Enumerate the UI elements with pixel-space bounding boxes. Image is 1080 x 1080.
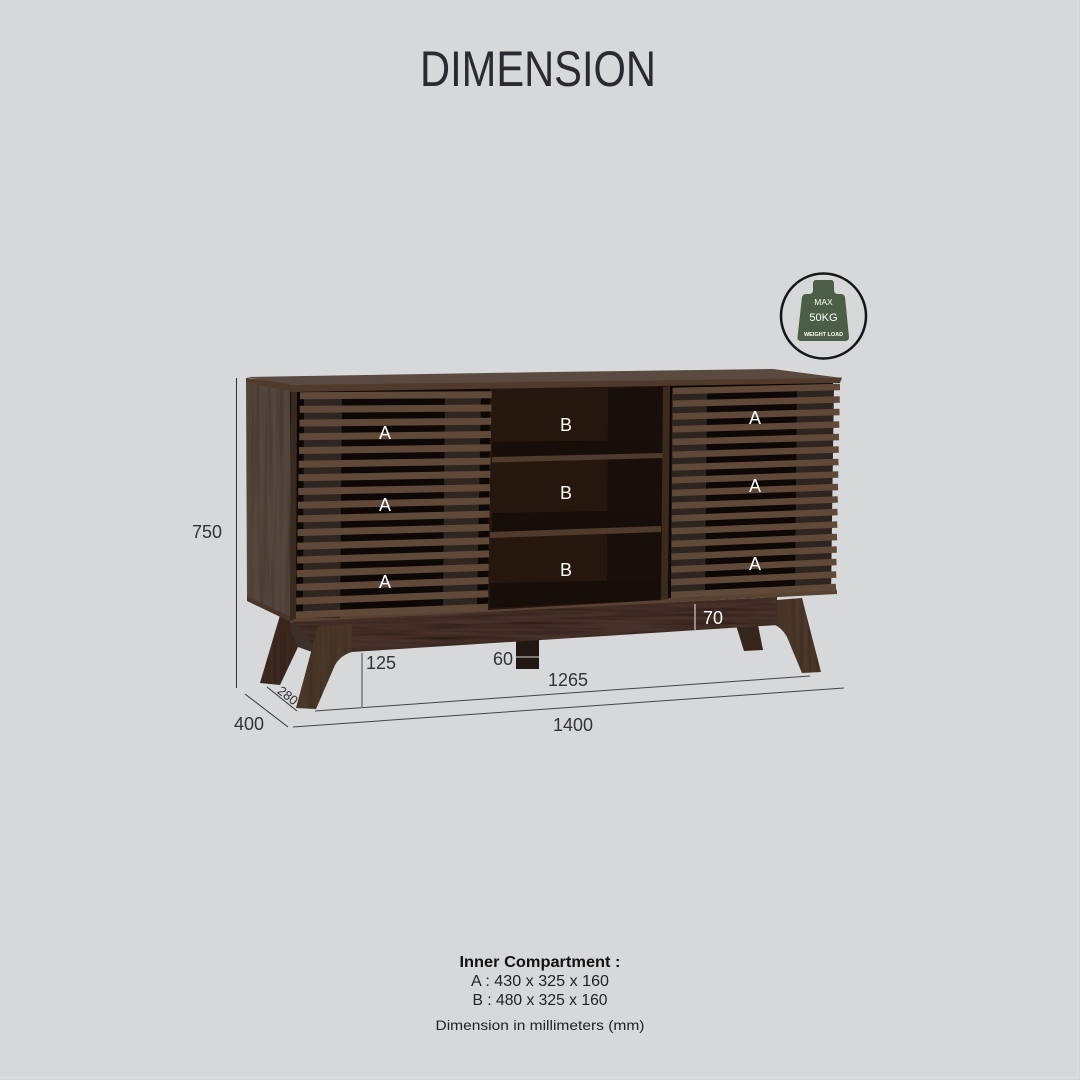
compartment labels: A [749, 476, 761, 496]
cabinet top surface [246, 369, 842, 385]
base lip [290, 590, 837, 622]
centre leg [516, 640, 539, 669]
centre divider post [661, 386, 670, 600]
front backing [290, 382, 833, 620]
icon: max weight load badge: WEIGHT LOAD [804, 332, 843, 338]
title: DIMENSION [420, 41, 656, 97]
back right leg [735, 620, 763, 651]
shelf side wall [607, 387, 664, 600]
dimension values: 280 [275, 683, 301, 708]
side panel bottom lip [247, 596, 293, 623]
dimension lines [236, 378, 844, 727]
left door inner panels [303, 393, 481, 618]
inner compartment notes: Inner Compartment : [460, 954, 620, 971]
inner compartment notes: Dimension in millimeters (mm) [436, 1018, 644, 1033]
compartment labels: A [749, 554, 761, 574]
back left leg [260, 612, 300, 685]
dimension values: 1265 [548, 670, 588, 690]
dimension values: 125 [366, 653, 396, 673]
compartment labels: B [560, 560, 572, 580]
dimension values [192, 522, 723, 735]
compartment labels: A [379, 423, 391, 443]
front right leg [775, 598, 821, 673]
left door slats [296, 395, 492, 615]
inner compartment notes: A : 430 x 325 x 160 [471, 973, 609, 990]
inner compartment notes: B : 480 x 325 x 160 [472, 992, 608, 1009]
inner compartment notes [436, 954, 644, 1033]
icon: max weight load badge: 50KG [809, 312, 838, 324]
leg connector [290, 620, 320, 652]
icon: max weight load badge [781, 274, 866, 358]
dimension values: 60 [493, 649, 513, 669]
shelf 1 [492, 453, 663, 462]
shelf 2 [490, 526, 661, 538]
dimension values: 400 [234, 714, 264, 734]
tv cabinet [246, 369, 842, 709]
left door side strip [290, 391, 297, 620]
compartment labels: B [560, 415, 572, 435]
open shelves [488, 386, 664, 610]
front left leg [296, 624, 352, 709]
dimension values: 70 [703, 608, 723, 628]
dimension values: 750 [192, 522, 222, 542]
compartment labels: A [379, 495, 391, 515]
icon: max weight load badge: MAX [814, 297, 833, 307]
compartment labels: A [379, 572, 391, 592]
cabinet top front edge [246, 378, 842, 392]
compartment labels [379, 408, 761, 592]
right door inner panels [671, 384, 834, 598]
base apron [293, 597, 777, 652]
compartment labels: A [749, 408, 761, 428]
compartment labels: B [560, 483, 572, 503]
left side panel [246, 380, 291, 620]
dimension values: 1400 [553, 715, 593, 735]
right door slats [671, 387, 840, 595]
